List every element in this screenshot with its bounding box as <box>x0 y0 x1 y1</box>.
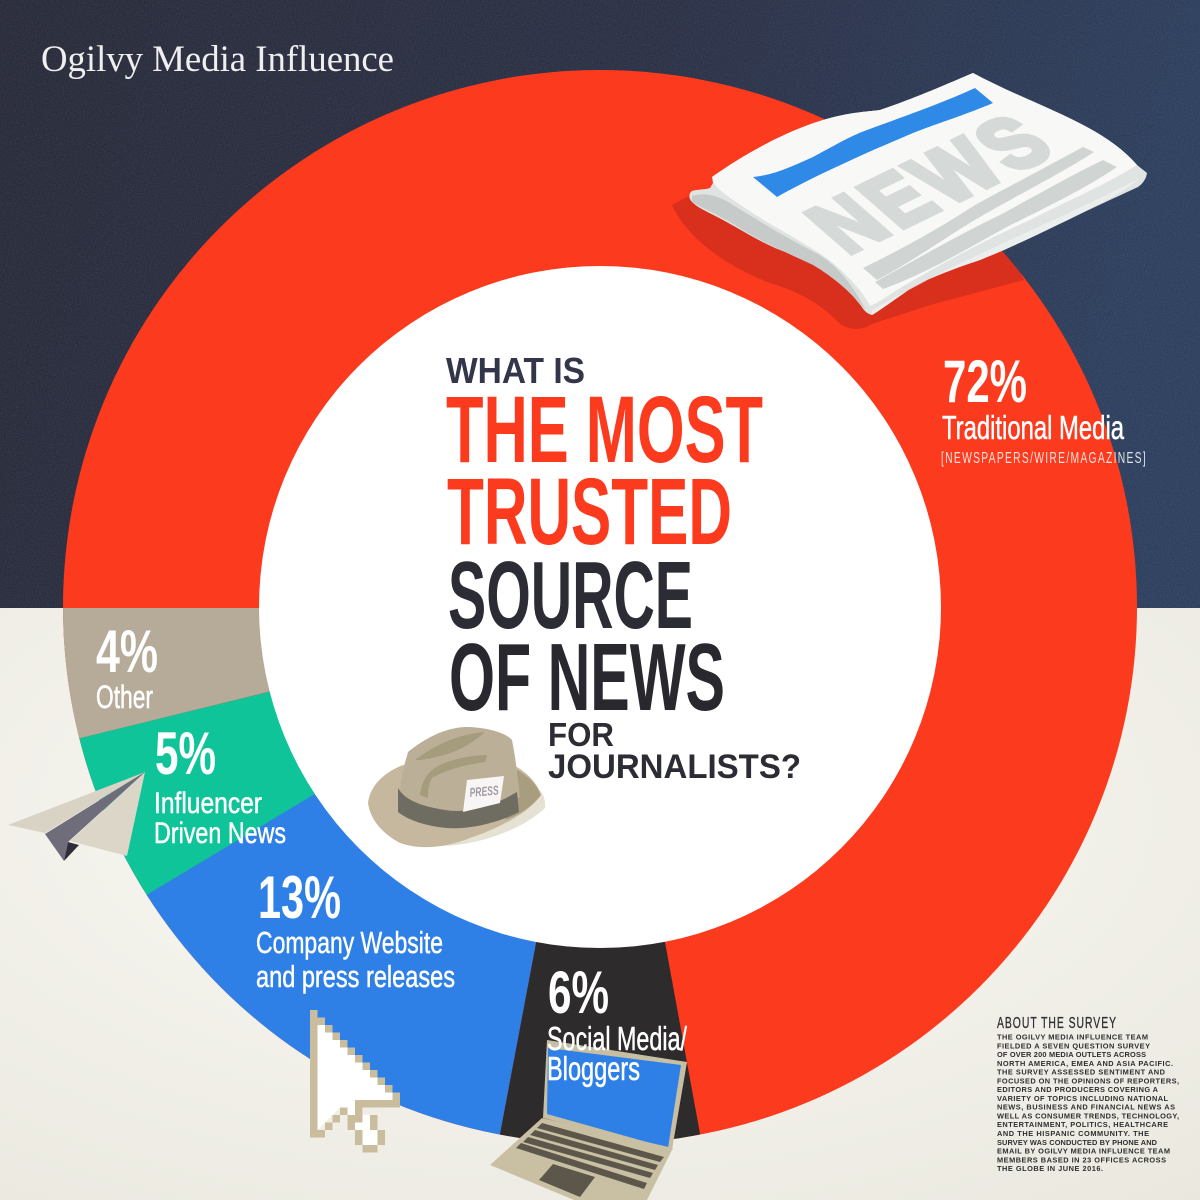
label: 6% social media bloggers: 6% <box>548 959 609 1026</box>
headline <box>446 350 801 786</box>
label: 13% company website and press releases: Company Website <box>256 925 443 960</box>
headline: OF NEWS <box>449 624 725 731</box>
hat under-shadow <box>430 789 545 846</box>
navy paper grain texture <box>0 0 1200 608</box>
about body copy: VARIETY OF TOPICS INCLUDING NATIONAL <box>997 1094 1168 1103</box>
plane tail fold <box>64 842 79 861</box>
label: 13% company website and press releases: and press releases <box>256 959 455 994</box>
about body copy: THE OGILVY MEDIA INFLUENCE TEAM <box>997 1032 1148 1042</box>
newspaper lower sheet <box>872 178 1140 315</box>
label: 5% influencer driven news: Influencer <box>154 787 262 820</box>
icon: press hat <box>368 727 545 847</box>
label: 72% traditional media: Traditional Media <box>942 409 1124 446</box>
background: navy upper half <box>0 0 1200 608</box>
newspaper front page <box>712 73 1137 306</box>
newspaper text line two <box>875 160 1117 289</box>
headline: JOURNALISTS? <box>548 748 801 786</box>
newspaper headline word: NEWS <box>787 98 1076 267</box>
about body copy: WELL AS CONSUMER TRENDS, TECHNOLOGY, <box>997 1112 1179 1120</box>
about body copy: NORTH AMERICA, EMEA AND ASIA PACIFIC. <box>997 1059 1173 1068</box>
segment: company website 13% <box>146 794 536 1134</box>
about heading: ABOUT THE SURVEY <box>997 1015 1117 1032</box>
newspaper inner fold <box>692 194 866 310</box>
laptop keyboard rows <box>516 1123 664 1189</box>
icon: newspaper <box>689 73 1147 315</box>
plane right wing <box>70 772 145 856</box>
headline: THE MOST <box>446 377 763 483</box>
label: 4% other: Other <box>96 679 153 715</box>
label: 13% company website and press releases: 13% <box>258 864 341 931</box>
label: 6% social media bloggers <box>547 959 688 1087</box>
segment: other 4% <box>63 608 270 738</box>
about body copy: FOCUSED ON THE OPINIONS OF REPORTERS, <box>997 1076 1179 1085</box>
about body copy: EDITORS AND PRODUCERS COVERING A <box>997 1085 1159 1094</box>
plane left wing <box>8 772 145 833</box>
headline: FOR <box>548 716 614 753</box>
laptop base <box>490 1118 673 1200</box>
hat brim <box>368 765 541 847</box>
hat band <box>398 788 519 828</box>
about the survey text block <box>997 1015 1179 1173</box>
label: 5% influencer driven news <box>154 720 286 850</box>
laptop screen <box>547 1048 681 1148</box>
hat crown crease side <box>420 755 487 798</box>
label: 6% social media bloggers: Bloggers <box>547 1050 640 1087</box>
label: 5% influencer driven news: Driven News <box>154 817 286 850</box>
label: 6% social media bloggers: Social Media/ <box>547 1020 688 1057</box>
about body copy: THE GLOBE IN JUNE 2016. <box>997 1164 1103 1173</box>
about body copy: THE SURVEY ASSESSED SENTIMENT AND <box>997 1068 1166 1077</box>
plane centre fold <box>45 772 145 861</box>
about body copy: OF OVER 200 MEDIA OUTLETS ACROSS <box>997 1050 1146 1059</box>
about body copy: NEWS, BUSINESS AND FINANCIAL NEWS AS <box>997 1103 1175 1112</box>
icon: laptop <box>490 1040 687 1200</box>
headline: WHAT IS <box>446 350 585 391</box>
cursor fill <box>318 1025 392 1145</box>
label: 4% other: 4% <box>96 618 158 685</box>
icon: pixel cursor <box>310 1010 400 1152</box>
label: 72% traditional media <box>941 348 1147 467</box>
hat brim far side <box>505 770 541 820</box>
laptop screen frame <box>543 1040 687 1150</box>
headline: SOURCE <box>448 542 693 649</box>
label: 5% influencer driven news: 5% <box>155 720 216 787</box>
brand title: Ogilvy Media Influence <box>41 39 394 80</box>
newspaper text line one <box>863 147 1094 280</box>
about body copy: ENTERTAINMENT, POLITICS, HEALTHCARE <box>997 1120 1168 1129</box>
segment: social media 6% <box>500 942 700 1139</box>
about body copy: SURVEY WAS CONDUCTED BY PHONE AND <box>997 1138 1158 1147</box>
press card <box>463 776 504 812</box>
headline: TRUSTED <box>447 459 732 565</box>
cursor outline pixels <box>310 1010 400 1152</box>
label: 72% traditional media: 72% <box>943 348 1027 415</box>
laptop trackpad <box>539 1164 595 1197</box>
donut hole <box>259 266 941 948</box>
label: 4% other <box>96 618 158 715</box>
newspaper shadow <box>672 190 1024 329</box>
about body copy: MEMBERS BASED IN 23 OFFICES ACROSS <box>997 1155 1166 1164</box>
about body copy <box>997 1032 1179 1173</box>
about body copy: AND THE HISPANIC COMMUNITY. THE <box>997 1129 1149 1138</box>
icon: paper plane <box>8 772 145 861</box>
about body copy: EMAIL BY OGILVY MEDIA INFLUENCE TEAM <box>997 1147 1170 1156</box>
background: cream lower half <box>0 608 1200 1200</box>
press card label: PRESS <box>469 782 499 800</box>
newspaper blue headline bar <box>753 88 993 197</box>
hat crown <box>400 727 520 818</box>
hat crown crease top <box>415 732 485 760</box>
about body copy: FIELDED A SEVEN QUESTION SURVEY <box>997 1041 1150 1050</box>
segment: influencer driven news 5% <box>79 692 315 895</box>
label: 13% company website and press releases <box>256 864 455 994</box>
newspaper lower pages <box>689 73 1147 315</box>
